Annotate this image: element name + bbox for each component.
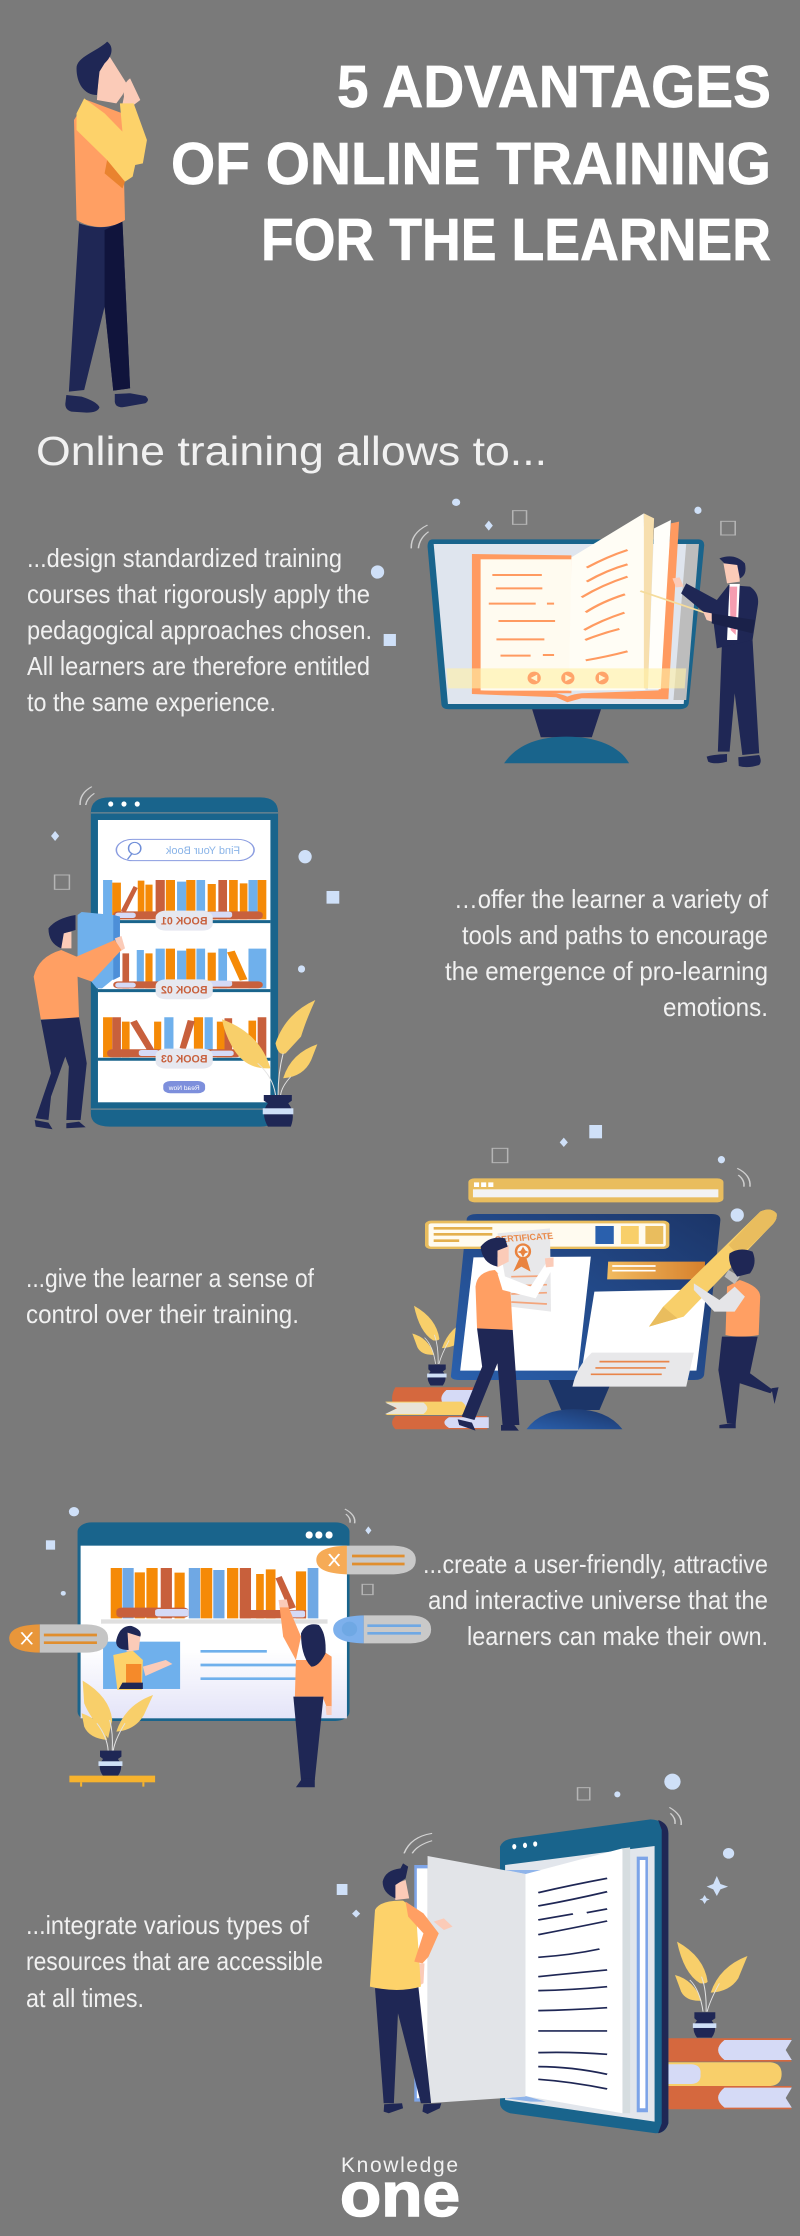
text block 1: to the same experience. [27, 687, 276, 717]
subheading: Online training allows to... [36, 428, 547, 474]
illustration: monitor with open book and presenter [371, 499, 761, 767]
text block 1: courses that rigorously apply the [27, 579, 370, 609]
logo: Knowledge One: one [340, 2161, 460, 2230]
text block 3: ...give the learner a sense of [26, 1263, 315, 1293]
text block 1 [27, 543, 372, 717]
illustration: phone bookshelf with man: BOOK 01 [161, 916, 207, 928]
text block 3 [26, 1263, 315, 1329]
illustration: phone bookshelf with man: Find Your Book [165, 845, 240, 857]
title [171, 54, 771, 273]
text block 4: learners can make their own. [467, 1621, 768, 1651]
text block 4: ...create a user-friendly, attractive [423, 1549, 768, 1579]
illustration: browser window with bookshelf and woman [9, 1507, 431, 1787]
text block 1: ...design standardized training [27, 543, 342, 573]
text block 2 [445, 884, 769, 1022]
illustration: phone bookshelf with man: BOOK 02 [161, 984, 207, 996]
text block 1: pedagogical approaches chosen. [27, 615, 372, 645]
illustration: thinking man [65, 42, 148, 413]
illustration: web page with certificate and pencil [385, 1125, 779, 1431]
text block 4: and interactive universe that the [428, 1585, 768, 1615]
text block 3: control over their training. [26, 1299, 299, 1329]
text block 1: All learners are therefore entitled [27, 651, 370, 681]
text block 4 [423, 1549, 768, 1651]
text block 5: at all times. [26, 1983, 144, 2013]
text block 2: …offer the learner a variety of [454, 884, 769, 914]
text block 2: the emergence of pro-learning [445, 956, 768, 986]
illustration: phone bookshelf with man: Read Now [169, 1085, 200, 1092]
title: OF ONLINE TRAINING [171, 131, 771, 197]
logo: Knowledge One: Knowledge [341, 2154, 458, 2177]
text block 2: tools and paths to encourage [462, 920, 768, 950]
illustration: web page with certificate and pencil: CERTIFICATE [494, 1231, 554, 1245]
title: 5 ADVANTAGES [337, 54, 771, 120]
illustration: phone bookshelf with man: BOOK 03 [161, 1054, 207, 1066]
text block 2: emotions. [663, 992, 768, 1022]
text block 5 [26, 1910, 323, 2013]
text block 5: ...integrate various types of [26, 1910, 310, 1940]
illustration: phone bookshelf with man [34, 787, 339, 1129]
text block 5: resources that are accessible [26, 1946, 323, 1976]
illustration: tablet open like a book with man [337, 1774, 792, 2133]
